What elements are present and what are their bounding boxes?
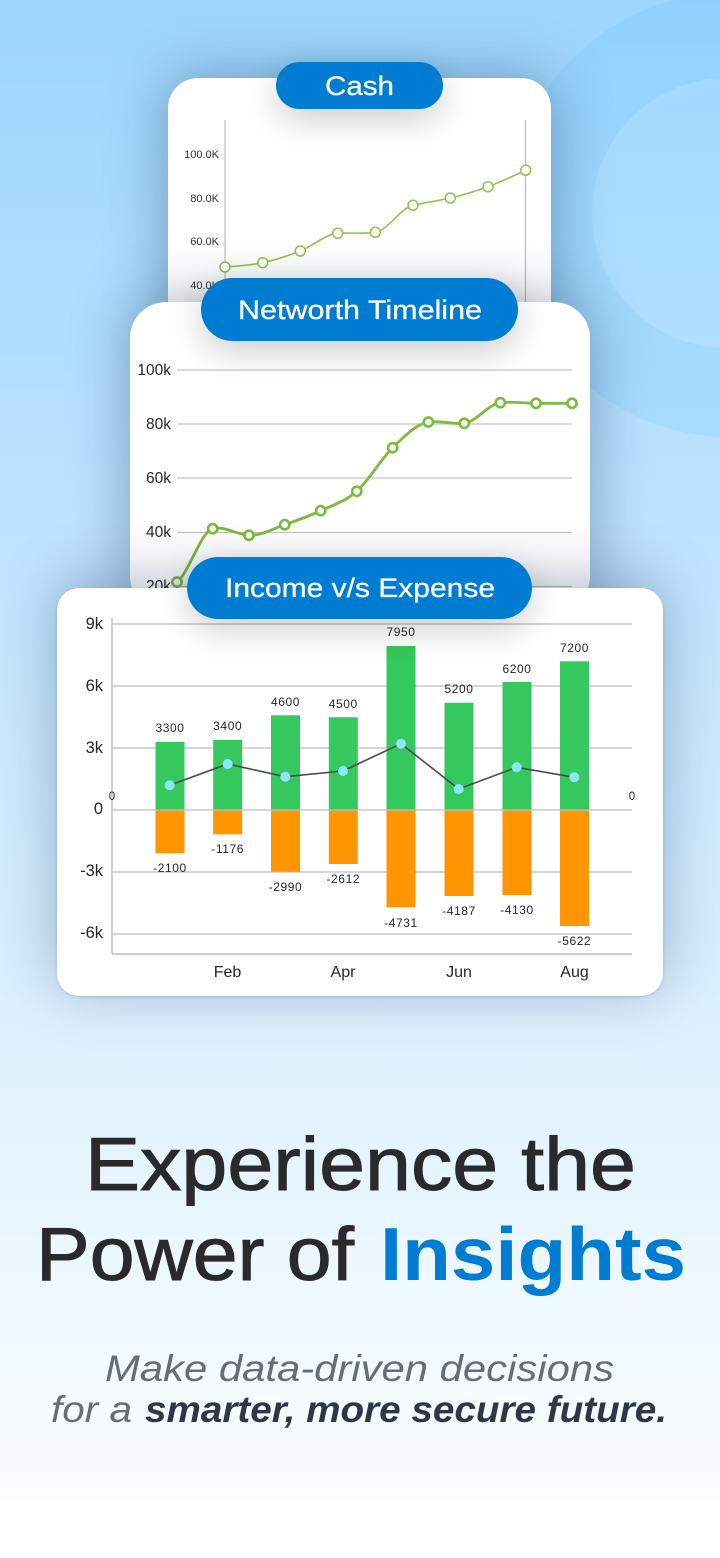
networth line chart: 20k bbox=[146, 578, 171, 595]
zero labels bbox=[109, 791, 635, 803]
headline: Power of bbox=[36, 1212, 354, 1296]
subheading: for a bbox=[51, 1389, 132, 1430]
cash line chart: 40.0K bbox=[190, 280, 220, 292]
panel: cash bbox=[168, 78, 551, 338]
bar value labels: -4187 bbox=[442, 904, 476, 918]
subheading: Make data-driven decisions bbox=[105, 1348, 614, 1389]
bar value labels: -1176 bbox=[211, 842, 244, 856]
networth line chart: 100k bbox=[137, 362, 171, 379]
bar value labels: -2612 bbox=[326, 872, 360, 886]
bar value labels: 3400 bbox=[213, 719, 242, 733]
y axis labels: 9k bbox=[86, 615, 104, 633]
bar value labels: 3300 bbox=[155, 721, 185, 735]
subheading: smarter, more secure future. bbox=[145, 1389, 667, 1430]
heading pill: Income v/s Expense bbox=[187, 557, 532, 619]
subheading bbox=[51, 1348, 667, 1430]
cash line chart: 60.0K bbox=[190, 236, 220, 248]
income bars bbox=[156, 646, 589, 810]
bar value labels: -4130 bbox=[500, 903, 534, 917]
y axis labels: -3k bbox=[80, 862, 104, 880]
heading pill: Networth Timeline: Networth Timeline bbox=[238, 295, 482, 325]
zero labels: 0 bbox=[629, 791, 635, 803]
zero labels: 0 bbox=[109, 791, 115, 803]
panel: income vs expense bbox=[57, 588, 663, 996]
x axis labels: Aug bbox=[560, 964, 589, 981]
bar value labels: 7950 bbox=[386, 625, 416, 639]
networth line chart: 60k bbox=[146, 470, 171, 487]
income vs expense combo chart bbox=[80, 615, 635, 981]
bar value labels: -5622 bbox=[558, 934, 591, 948]
y axis labels: 0 bbox=[94, 800, 103, 818]
heading pill: Networth Timeline bbox=[201, 278, 518, 341]
heading pill: Income v/s Expense: Income v/s Expense bbox=[225, 573, 495, 603]
networth line chart: 40k bbox=[146, 524, 171, 541]
headline bbox=[36, 1122, 686, 1296]
bar value labels: -4731 bbox=[384, 916, 418, 930]
bar value labels: 4500 bbox=[329, 697, 358, 711]
bar value labels: 6200 bbox=[502, 662, 532, 676]
y axis labels: -6k bbox=[80, 924, 104, 942]
x axis labels: Apr bbox=[331, 964, 356, 981]
x axis labels: Jun bbox=[446, 964, 472, 981]
networth line chart bbox=[137, 362, 578, 595]
cash line chart bbox=[184, 120, 532, 302]
y axis labels: 6k bbox=[86, 677, 104, 695]
bar value labels: -2990 bbox=[269, 880, 302, 894]
heading pill: Cash: Cash bbox=[325, 71, 394, 101]
bar value labels bbox=[153, 625, 591, 948]
bar value labels: 4600 bbox=[271, 695, 300, 709]
y axis labels: 3k bbox=[86, 739, 104, 757]
bar value labels: 7200 bbox=[560, 641, 589, 655]
cash line chart: 100.0K bbox=[184, 149, 220, 161]
expense bars bbox=[156, 810, 589, 926]
cash line chart: 80.0K bbox=[190, 193, 220, 205]
bar value labels: 5200 bbox=[444, 682, 474, 696]
y axis labels bbox=[80, 615, 104, 942]
decorative background circles bbox=[546, 0, 720, 436]
x axis labels bbox=[214, 964, 589, 981]
networth line chart: 80k bbox=[146, 416, 171, 433]
net trend line bbox=[165, 739, 579, 794]
panel: networth timeline bbox=[130, 302, 590, 612]
bar value labels: -2100 bbox=[153, 861, 187, 875]
heading pill: Cash bbox=[276, 62, 443, 109]
headline: Experience the bbox=[85, 1122, 636, 1206]
headline: Insights bbox=[380, 1212, 686, 1296]
x axis labels: Feb bbox=[214, 964, 241, 981]
